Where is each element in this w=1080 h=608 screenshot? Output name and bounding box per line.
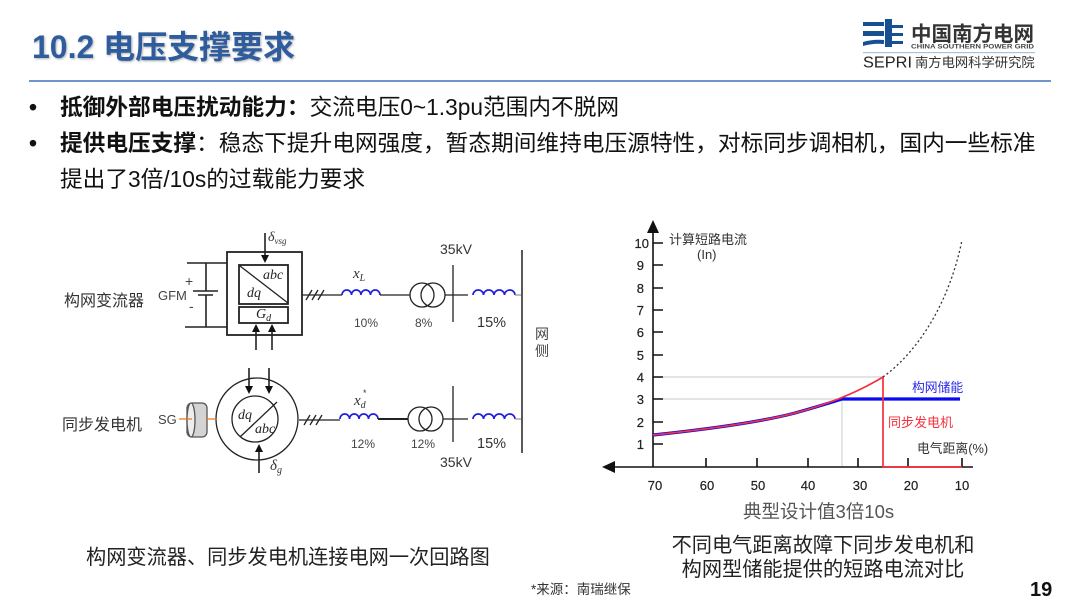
- upper feeder line: 15%: [477, 315, 506, 331]
- upper feeder line: 8%: [415, 316, 433, 330]
- bullet 2: ：稳态下提升电网强度，暂态期间维持电压源特性，对标同步调相机，国内一些标准: [196, 130, 1036, 156]
- x tick labels: [648, 478, 969, 493]
- GFM converter block: δ: [268, 230, 275, 245]
- axes: [612, 230, 973, 467]
- lower feeder line: *: [363, 388, 367, 398]
- label: grid side: 侧: [535, 343, 549, 359]
- label: grid side: [535, 326, 549, 359]
- icon: logo mark: [863, 19, 903, 47]
- y axis title: (In): [697, 247, 716, 262]
- x tick labels: 20: [904, 478, 918, 493]
- lower feeder line: 15%: [477, 436, 506, 452]
- upper feeder line: 10%: [354, 316, 378, 330]
- synchronous generator block: SG: [158, 412, 177, 427]
- GFM converter block: vsg: [275, 236, 287, 246]
- label: synchronous generator: 同步发电机: [62, 416, 142, 434]
- y tick labels: 6: [637, 325, 644, 340]
- bullet 1: •: [29, 94, 37, 120]
- GFM converter block: -: [189, 298, 194, 314]
- upper feeder line: x: [353, 266, 360, 282]
- synchronous generator block: g: [277, 465, 282, 476]
- caption: circuit diagram: 构网变流器、同步发电机连接电网一次回路图: [86, 546, 490, 569]
- lower feeder line: 12%: [411, 437, 435, 451]
- y tick labels: 2: [637, 415, 644, 430]
- bullet list: [29, 94, 1036, 192]
- y tick labels: 10: [635, 236, 649, 251]
- bullet 1: 抵御外部电压扰动能力：: [60, 94, 310, 120]
- x tick labels: 50: [751, 478, 765, 493]
- logo: China Southern Power Grid / SEPRI: [863, 19, 1035, 72]
- GFM converter block: G: [256, 307, 266, 322]
- bullet 2: •: [29, 130, 37, 156]
- upper feeder line: [342, 241, 521, 331]
- label: GFM converter: 构网变流器: [64, 292, 144, 310]
- x tick labels: 30: [853, 478, 867, 493]
- lower feeder line: [340, 386, 521, 470]
- y tick labels: 9: [637, 258, 644, 273]
- GFM converter block: abc: [263, 268, 284, 283]
- caption: chart: [672, 534, 974, 581]
- y tick labels: 8: [637, 281, 644, 296]
- GFM converter block: +: [185, 273, 193, 289]
- series label: generator: 同步发电机: [888, 415, 953, 430]
- synchronous generator block: [158, 368, 340, 476]
- page number: 19: [1030, 579, 1052, 601]
- GFM converter block: [158, 230, 342, 350]
- title: 10.2 电压支撑要求: [32, 29, 295, 65]
- logo: China Southern Power Grid / SEPRI: 南方电网科学研究院: [915, 55, 1035, 70]
- y tick labels: [635, 236, 649, 452]
- lower feeder line: d: [361, 400, 367, 411]
- GFM converter block: d: [266, 313, 272, 324]
- synchronous generator block: dq: [238, 408, 252, 423]
- y axis title: 计算短路电流: [669, 232, 747, 247]
- curve: grid-forming storage: [653, 399, 960, 435]
- y tick labels: 4: [637, 370, 644, 385]
- GFM converter block: dq: [247, 286, 261, 301]
- lower feeder line: x: [354, 393, 361, 409]
- curve: synchronous generator: [653, 377, 962, 467]
- caption: chart: 不同电气距离故障下同步发电机和: [672, 534, 974, 557]
- y tick labels: 7: [637, 303, 644, 318]
- logo: China Southern Power Grid / SEPRI: CHINA SOUTHERN POWER GRID: [911, 44, 1034, 50]
- gridlines: [653, 377, 883, 467]
- y tick labels: 3: [637, 392, 644, 407]
- chart subtitle: 典型设计值3倍10s: [743, 501, 894, 522]
- caption: chart: 构网型储能提供的短路电流对比: [682, 558, 964, 581]
- GFM converter block: GFM: [158, 288, 187, 303]
- x axis title: 电气距离(%): [917, 441, 988, 456]
- x tick labels: 40: [801, 478, 815, 493]
- x tick labels: 10: [955, 478, 969, 493]
- lower feeder line: 35kV: [440, 454, 473, 470]
- logo: China Southern Power Grid / SEPRI: 中国南方电网: [911, 22, 1034, 46]
- y tick labels: 5: [637, 348, 644, 363]
- short-circuit current chart: [602, 220, 988, 522]
- series label: storage: 构网储能: [912, 380, 963, 395]
- upper feeder line: L: [359, 273, 366, 284]
- y axis title: [669, 232, 747, 262]
- x tick labels: 70: [648, 478, 662, 493]
- label: grid side: 网: [535, 326, 549, 342]
- synchronous generator block: δ: [270, 458, 277, 474]
- source note: *来源：南瑞继保: [531, 582, 631, 597]
- axis arrows: [602, 220, 659, 473]
- synchronous generator block: abc: [255, 422, 276, 437]
- bullet 2: 提供电压支撑: [60, 130, 196, 156]
- lower feeder line: 12%: [351, 437, 375, 451]
- logo: China Southern Power Grid / SEPRI: SEPRI: [863, 54, 912, 72]
- upper feeder line: 35kV: [440, 241, 473, 257]
- bullet 2 continuation: 提出了3倍/10s的过载能力要求: [60, 166, 365, 192]
- curve: calculated extension: [883, 240, 962, 377]
- y tick labels: 1: [637, 437, 644, 452]
- grid busbar: [521, 250, 523, 453]
- bullet 1: 交流电压0~1.3pu范围内不脱网: [310, 94, 619, 120]
- x tick labels: 60: [700, 478, 714, 493]
- circuit diagram: [62, 230, 549, 476]
